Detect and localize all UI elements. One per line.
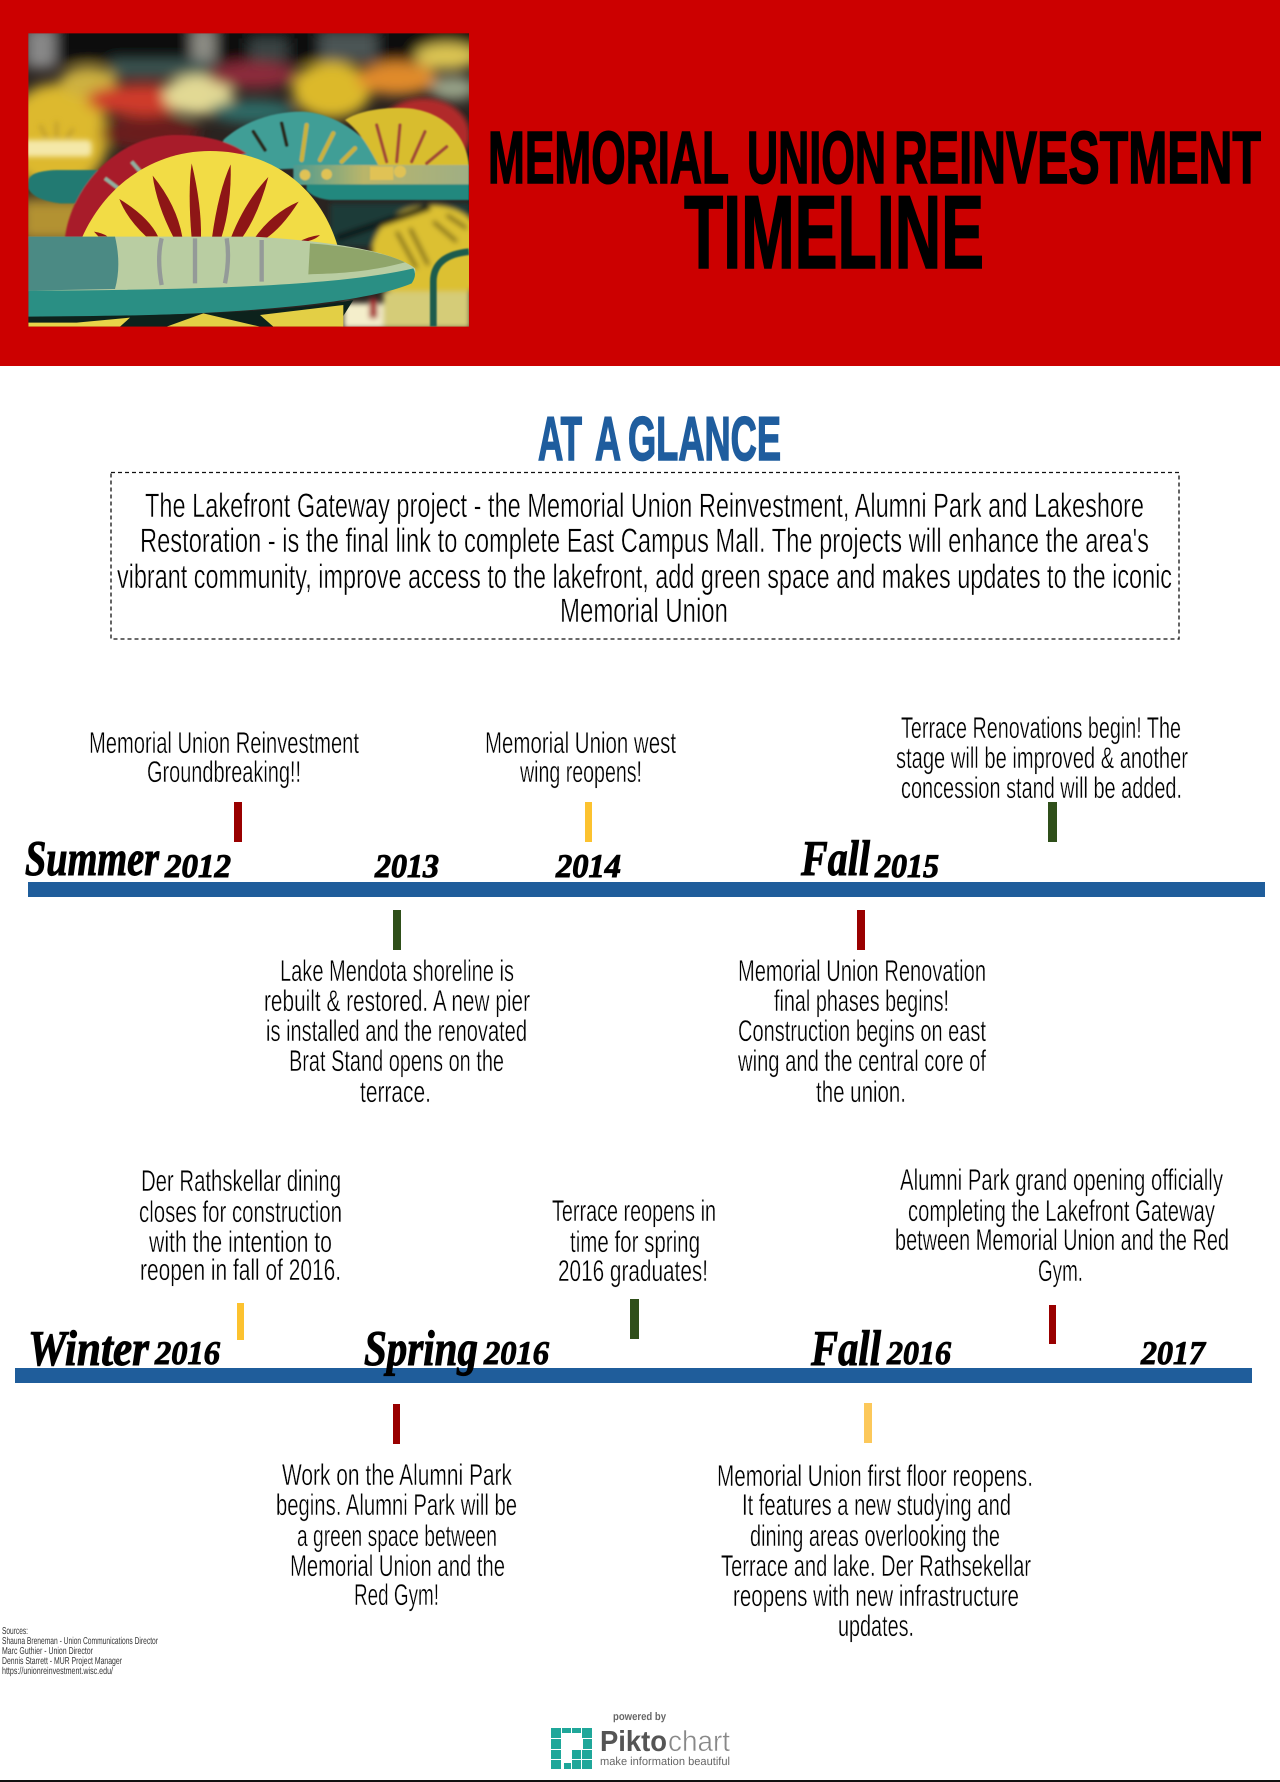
event: first floor reopens: dining areas overlooking the — [750, 1520, 1000, 1553]
event tick: first floor — [864, 1403, 872, 1443]
title: UNION — [747, 116, 886, 199]
event: der rathskellar closes: Der Rathskellar dining — [141, 1165, 341, 1198]
tagline: make information beautiful — [600, 1756, 730, 1768]
panel: at a glance summary: Memorial Union — [560, 592, 728, 630]
sources: Shauna Breneman - Union Communications Director — [2, 1636, 158, 1647]
event tick: terrace reopens — [630, 1299, 639, 1339]
event: der rathskellar closes: reopen in fall of 2016. — [140, 1254, 341, 1287]
event: first floor reopens: Memorial Union first floor reopens. — [717, 1460, 1033, 1493]
panel: at a glance summary — [111, 472, 1179, 639]
event: terrace renovations — [896, 712, 1188, 805]
event: west wing reopens: Memorial Union west — [485, 727, 676, 760]
event: first floor reopens: updates. — [838, 1610, 914, 1643]
event: alumni park work begins: Memorial Union and the — [290, 1550, 505, 1583]
event: der rathskellar closes: with the intention to — [148, 1226, 332, 1259]
event: groundbreaking: Groundbreaking!! — [147, 756, 301, 789]
date: 2013: 2013 — [374, 849, 439, 885]
event: alumni park work begins: begins. Alumni Park will be — [276, 1489, 517, 1522]
sources: Dennis Starrett - MUR Project Manager — [2, 1656, 122, 1667]
event: final phases — [737, 955, 986, 1109]
date: fall 2015: 2015 — [874, 849, 939, 885]
event: final phases: the union. — [816, 1076, 906, 1109]
heading: at a glance: AT — [538, 405, 582, 474]
heading: at a glance: GLANCE — [628, 405, 781, 474]
sources — [2, 1626, 158, 1677]
event: alumni park grand opening — [895, 1164, 1229, 1288]
event: west wing reopens — [485, 727, 676, 789]
event: first floor reopens: It features a new studying and — [742, 1489, 1011, 1522]
event: west wing reopens: wing reopens! — [519, 756, 642, 789]
event: der rathskellar closes — [139, 1165, 342, 1287]
event: alumni park work begins — [276, 1459, 517, 1612]
event: final phases: final phases begins! — [774, 985, 949, 1018]
event tick: terrace renovations — [1048, 802, 1057, 842]
event: alumni park work begins: Work on the Alumni Park — [282, 1459, 513, 1492]
event: final phases: Construction begins on east — [738, 1015, 986, 1048]
sources: https://unionreinvestment.wisc.edu/ — [2, 1666, 113, 1677]
event: first floor reopens: reopens with new infrastructure — [733, 1580, 1019, 1613]
date: fall 2016: Fall — [810, 1320, 881, 1376]
header band — [0, 0, 1280, 366]
icon: piktochart mark — [551, 1728, 592, 1769]
title: TIMELINE — [684, 175, 984, 291]
event tick: alumni park opening — [1049, 1305, 1056, 1344]
sources: Marc Guthier - Union Director — [2, 1646, 93, 1657]
date: summer 2012: 2012 — [164, 849, 231, 885]
title: MEMORIAL — [488, 116, 729, 199]
event: alumni park work begins: a green space between — [297, 1520, 497, 1553]
date: winter 2016: 2016 — [154, 1336, 220, 1372]
date: 2017: 2017 — [1140, 1336, 1206, 1372]
date: fall 2016 — [810, 1320, 951, 1376]
date: 2014: 2014 — [555, 849, 621, 885]
event tick: groundbreaking — [234, 802, 242, 842]
date: spring 2016: 2016 — [483, 1336, 549, 1372]
event: terrace reopens: 2016 graduates! — [558, 1255, 708, 1288]
timeline 2012-2015 — [25, 802, 1265, 950]
wordmark: Pikto — [600, 1726, 667, 1758]
timeline bar — [15, 1368, 1252, 1383]
sources: Sources: — [2, 1626, 28, 1637]
event: shoreline rebuilt: Lake Mendota shoreline is — [280, 955, 514, 988]
timeline bar — [28, 882, 1265, 897]
event: final phases: Memorial Union Renovation — [738, 955, 986, 988]
event: alumni park grand opening: Gym. — [1038, 1255, 1083, 1288]
photo: colourful terrace chairs — [28, 33, 469, 327]
date: fall 2016: 2016 — [886, 1336, 951, 1372]
date: fall 2015 — [800, 830, 939, 886]
date: spring 2016: Spring — [364, 1320, 478, 1376]
event tick: west wing — [585, 802, 592, 842]
event: alumni park work begins: Red Gym! — [354, 1579, 439, 1612]
event tick: shoreline — [393, 910, 401, 950]
piktochart logo — [551, 1711, 730, 1769]
date: summer 2012: Summer — [25, 830, 159, 886]
powered by: powered by — [613, 1711, 667, 1723]
event: groundbreaking: Memorial Union Reinvestment — [89, 727, 359, 760]
wordmark light: chart — [668, 1726, 730, 1758]
event: terrace reopens: Terrace reopens in — [552, 1195, 716, 1228]
event: shoreline rebuilt: rebuilt & restored. A new pier — [264, 985, 530, 1018]
event: der rathskellar closes: closes for construction — [139, 1196, 342, 1229]
event: terrace reopens — [552, 1195, 716, 1288]
event: shoreline rebuilt: is installed and the renovated — [266, 1015, 527, 1048]
heading: at a glance: A — [595, 405, 621, 474]
event: groundbreaking — [89, 727, 359, 789]
event: terrace reopens: time for spring — [570, 1226, 700, 1259]
date: fall 2015: Fall — [800, 830, 870, 886]
event: shoreline rebuilt: terrace. — [360, 1076, 431, 1109]
timeline 2016-2017 — [15, 1299, 1252, 1444]
event tick: rathskellar — [237, 1303, 244, 1340]
event: first floor reopens: Terrace and lake. Der Rathsekellar — [721, 1550, 1031, 1583]
event: first floor reopens — [717, 1460, 1033, 1643]
date: winter 2016: Winter — [28, 1320, 149, 1376]
event: shoreline rebuilt: Brat Stand opens on the — [289, 1045, 504, 1078]
event tick: final phases — [857, 910, 865, 950]
title — [488, 116, 1261, 291]
heading: at a glance — [538, 405, 781, 474]
event tick: alumni park work — [393, 1404, 400, 1444]
event: final phases: wing and the central core of — [737, 1045, 986, 1078]
event: shoreline rebuilt — [264, 955, 530, 1109]
